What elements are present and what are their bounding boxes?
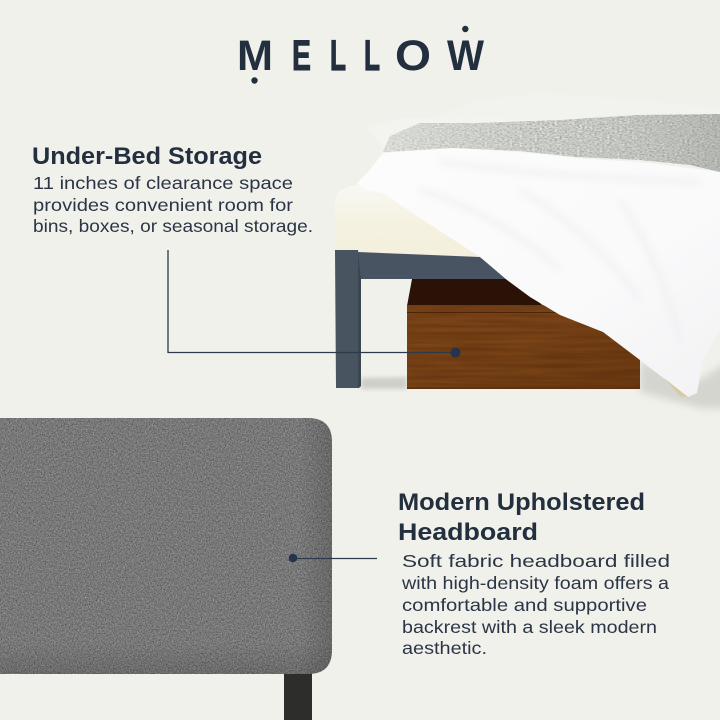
heading: modern upholstered headboard	[398, 489, 645, 546]
duvet underside edge	[664, 378, 688, 397]
body: headboard: comfortable and supportive	[402, 595, 647, 615]
callout: under-bed storage leader line	[168, 250, 460, 358]
logo: Mellow: L	[330, 32, 346, 80]
storage box front	[407, 305, 640, 389]
floor shadows	[361, 340, 720, 410]
text block: modern upholstered headboard	[398, 489, 670, 658]
logo: Mellow	[237, 26, 484, 84]
callout: headboard leader line	[289, 554, 377, 562]
logo: Mellow: M	[237, 32, 273, 80]
heading: modern upholstered headboard: Headboard	[398, 519, 538, 546]
heading: under-bed storage: Under-Bed Storage	[32, 143, 262, 170]
body: under-bed storage	[33, 173, 313, 236]
body: headboard: Soft fabric headboard filled	[402, 551, 670, 571]
body: headboard: aesthetic.	[402, 638, 487, 658]
body: under-bed storage: bins, boxes, or seasonal storage.	[33, 216, 313, 236]
logo: Mellow: E	[292, 32, 311, 80]
body: headboard: with high-density foam offers a	[401, 573, 669, 593]
mattress	[335, 182, 500, 262]
body: under-bed storage: provides convenient room for	[33, 195, 293, 215]
headboard	[0, 418, 332, 720]
heading: modern upholstered headboard: Modern Upholstered	[398, 489, 645, 516]
headboard panel	[0, 418, 332, 674]
duvet folds	[420, 162, 700, 340]
body: headboard	[401, 551, 670, 658]
knit blanket	[383, 114, 720, 172]
logo: Mellow: O	[395, 32, 431, 80]
body: under-bed storage: 11 inches of clearance space	[33, 173, 293, 193]
body: headboard: backrest with a sleek modern	[402, 617, 657, 637]
pillow behind blanket	[410, 93, 720, 170]
photo: bed with under-bed storage box	[335, 93, 720, 410]
headboard leg	[284, 672, 312, 720]
logo: Mellow: L	[364, 32, 380, 80]
frame beam	[358, 252, 508, 279]
text block: under-bed storage	[32, 143, 313, 236]
logo: Mellow: W	[447, 32, 484, 80]
white duvet	[357, 148, 720, 397]
frame leg	[335, 250, 361, 388]
storage box interior	[407, 279, 560, 320]
